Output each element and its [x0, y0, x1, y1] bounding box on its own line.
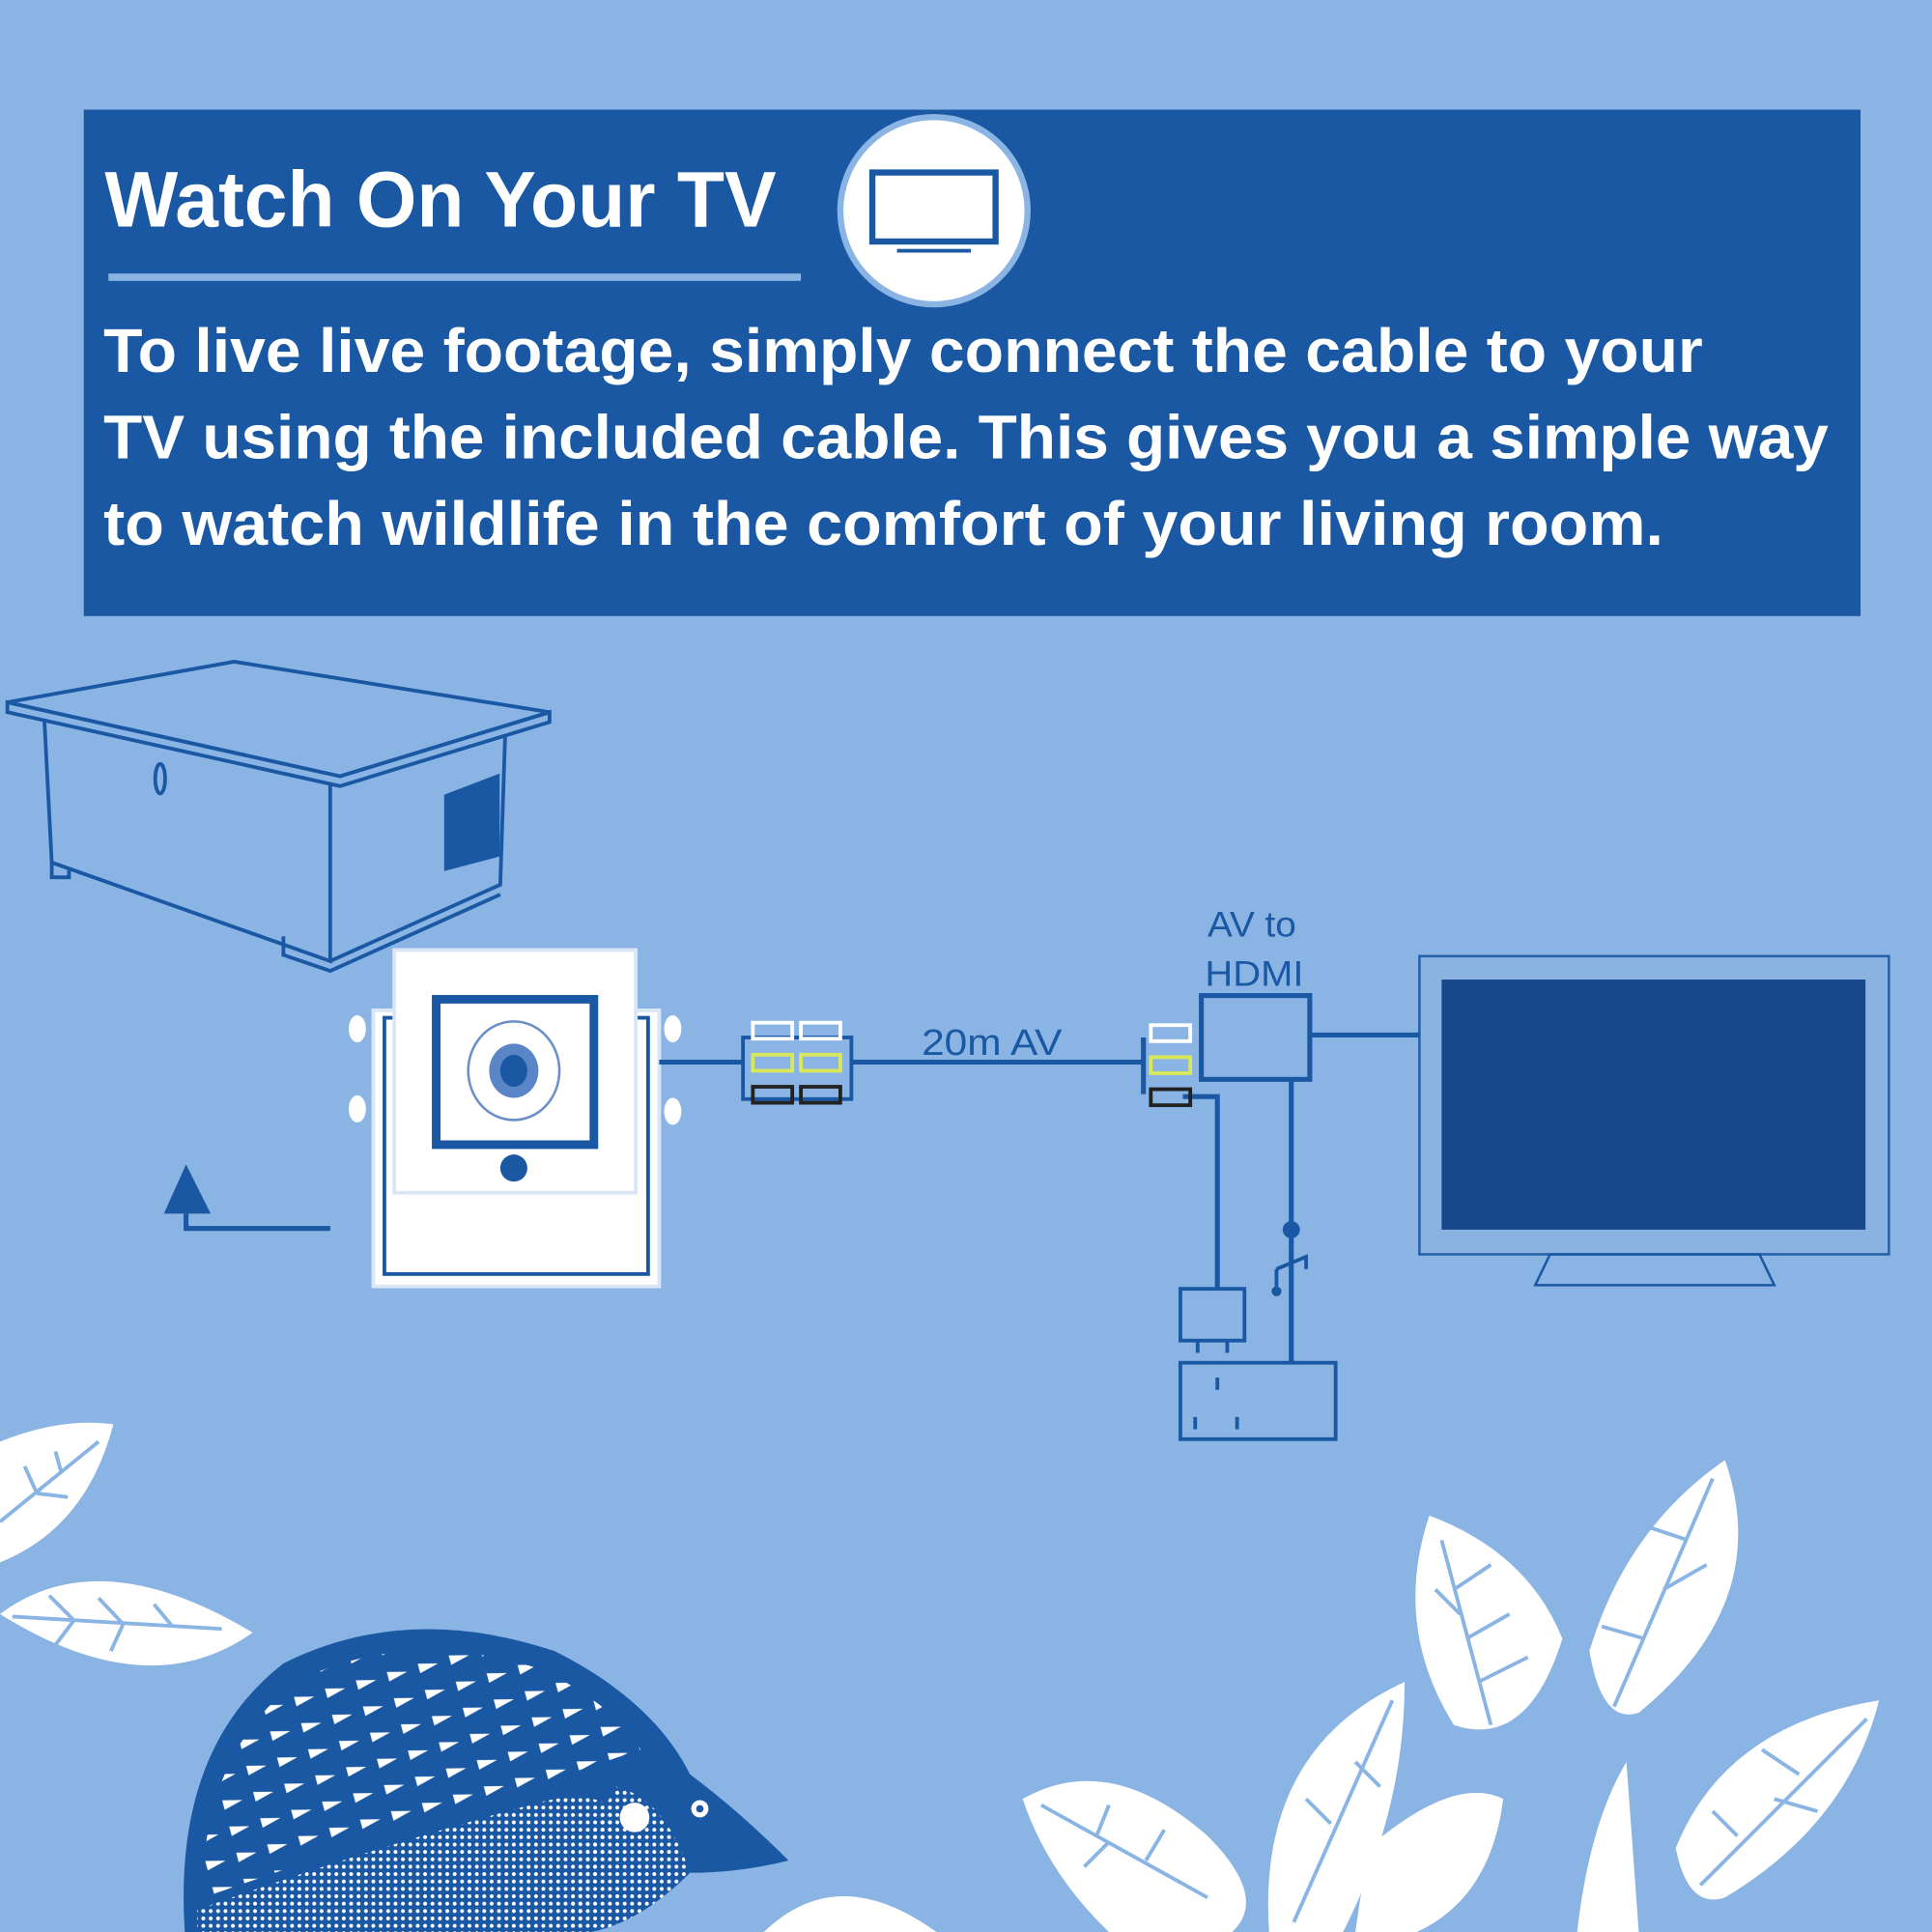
label: 20m AV: 20m AV — [922, 1022, 1063, 1064]
icon: usb — [1271, 1221, 1306, 1296]
hedgehog — [184, 1630, 788, 1932]
body text: to watch wildlife in the comfort of your living room. — [103, 489, 1663, 558]
leaves left — [0, 1423, 936, 1932]
RCA plugs — [753, 1023, 1190, 1105]
converter box — [1202, 996, 1310, 1079]
label: AV to HDMI: AV to — [1208, 904, 1296, 944]
body text: TV using the included cable. This gives you a simple way — [103, 402, 1829, 471]
camera unit — [349, 950, 681, 1287]
header panel — [84, 110, 1861, 616]
body text: To live live footage, simply connect the cable to your — [103, 316, 1703, 385]
body text — [103, 316, 1829, 558]
arrow: up pointing — [164, 1164, 330, 1229]
hedgehog house illustration — [8, 662, 550, 971]
cable and connectors — [659, 1035, 1419, 1363]
power adapter and socket — [1180, 1289, 1336, 1439]
label: AV to HDMI — [1205, 904, 1303, 993]
icon: tv in circle — [840, 117, 1028, 304]
television — [1419, 956, 1889, 1285]
leaves right — [1023, 1460, 1879, 1932]
title: Watch On Your TV — [104, 156, 777, 244]
label: AV to HDMI: HDMI — [1205, 953, 1303, 993]
